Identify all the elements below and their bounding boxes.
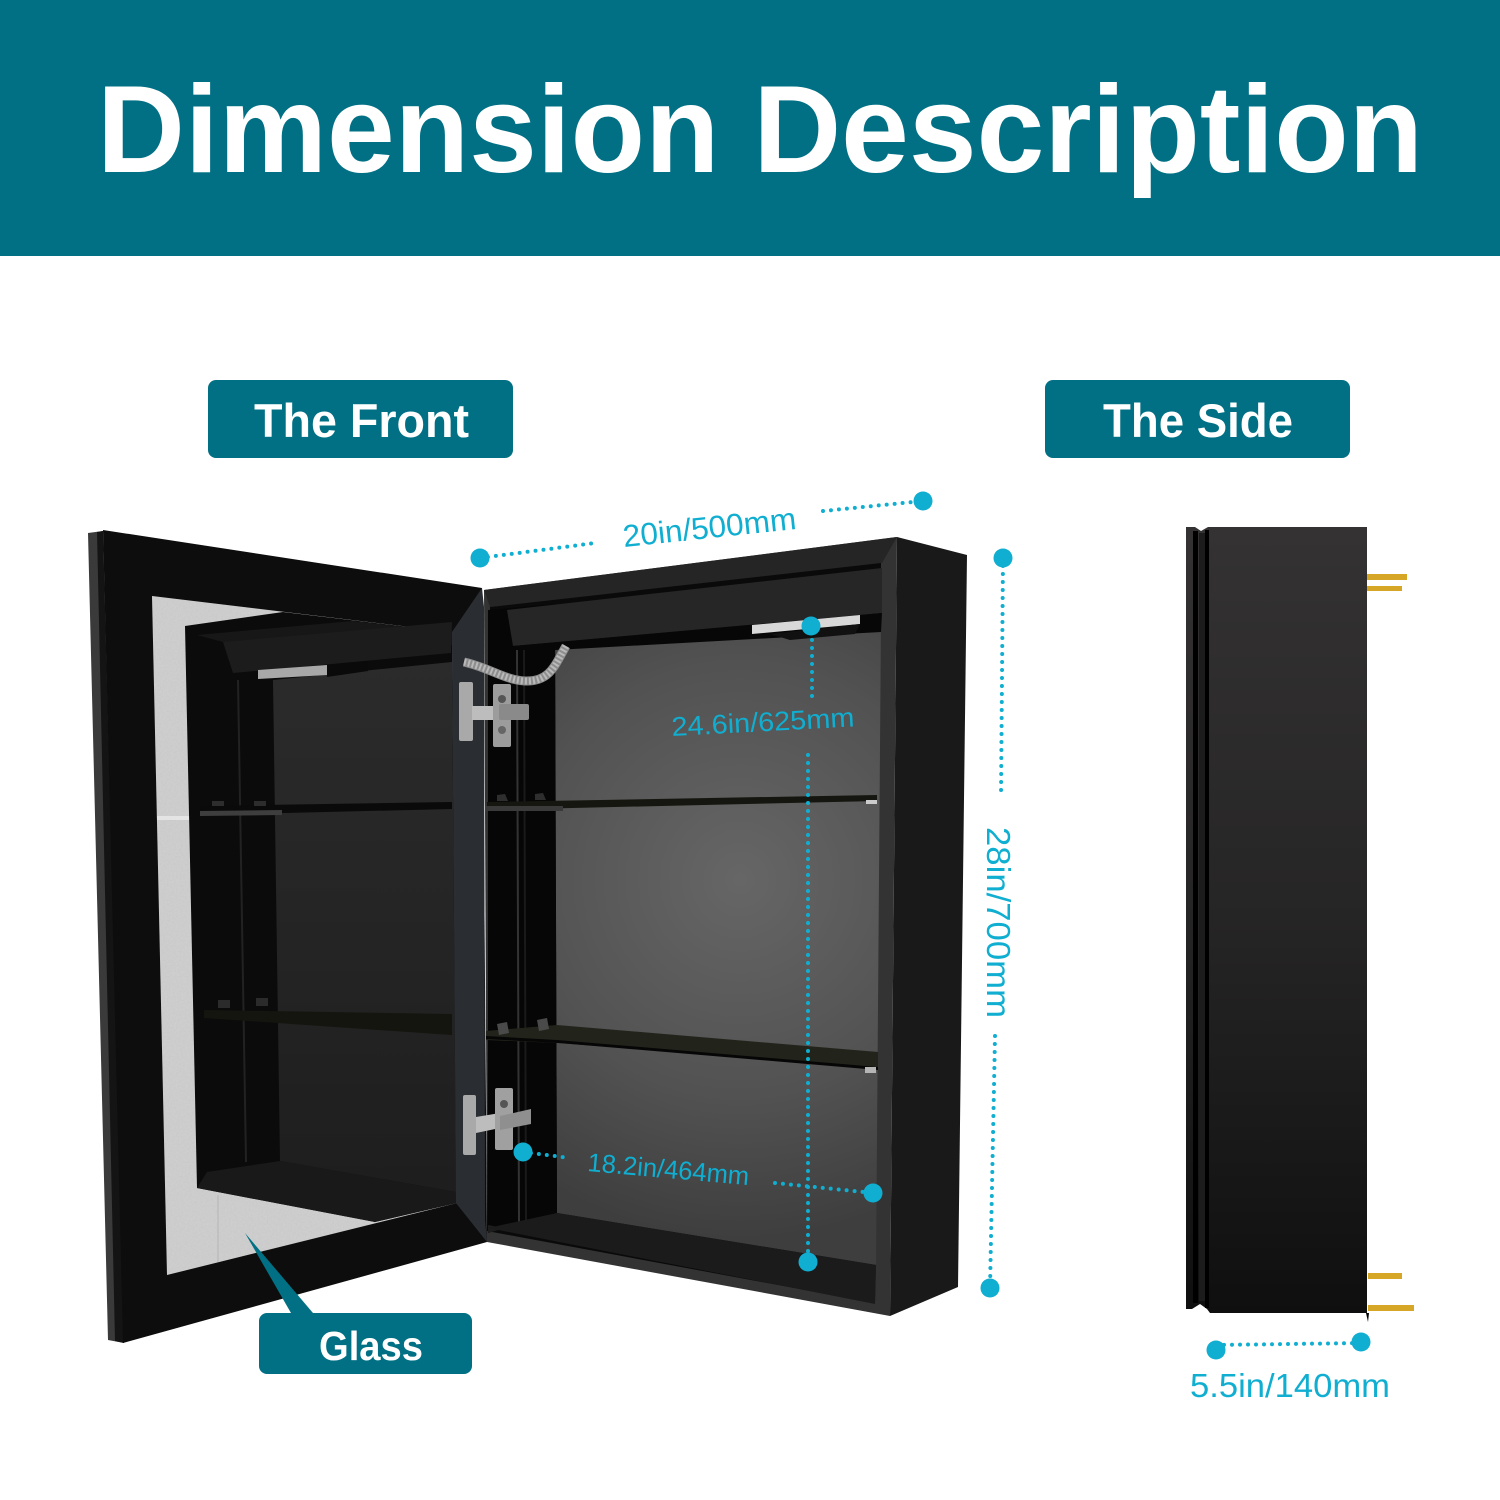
dimension: width 20in/500mm bbox=[470, 492, 932, 568]
cabinet front view bbox=[88, 530, 967, 1343]
badge: The Side bbox=[1045, 380, 1350, 458]
badge: The Side: The Side bbox=[1103, 394, 1293, 447]
dimension: height 28in/700mm: 28in/700mm bbox=[980, 827, 1017, 1018]
title: Dimension Description bbox=[97, 61, 1423, 199]
interior floor bbox=[488, 1213, 876, 1298]
interior left side bbox=[488, 604, 557, 1233]
badge: The Front: The Front bbox=[254, 394, 469, 447]
dimension: inner width 18.2in/464mm bbox=[514, 1142, 882, 1202]
lower hinge bbox=[463, 1088, 531, 1155]
dimension: width 20in/500mm: 20in/500mm bbox=[621, 501, 798, 554]
door hinge edge bbox=[452, 588, 487, 1242]
mounting pins bbox=[1367, 574, 1414, 1311]
upper hinge bbox=[459, 682, 529, 747]
reflected cabinet bbox=[185, 612, 457, 1222]
badge: The Front bbox=[208, 380, 513, 458]
lower shelf bbox=[486, 1018, 878, 1073]
cabinet side view bbox=[1186, 527, 1414, 1322]
interior back wall bbox=[555, 618, 881, 1265]
cabinet body bbox=[484, 537, 967, 1316]
dimension: depth 5.5in/140mm bbox=[1190, 1332, 1390, 1404]
valance bbox=[507, 568, 882, 646]
light strip bbox=[752, 615, 860, 640]
dimension: inner width 18.2in/464mm: 18.2in/464mm bbox=[586, 1147, 750, 1191]
title banner bbox=[0, 0, 1500, 256]
glass panel bbox=[152, 596, 457, 1275]
upper shelf bbox=[485, 793, 877, 811]
cable bbox=[464, 646, 566, 681]
dimension: depth 5.5in/140mm: 5.5in/140mm bbox=[1190, 1367, 1390, 1404]
glass callout bbox=[245, 1233, 472, 1374]
dimension: inner height 24.6in/625mm bbox=[671, 616, 855, 1272]
dimension: inner height 24.6in/625mm: 24.6in/625mm bbox=[671, 702, 855, 742]
open mirror door bbox=[88, 530, 487, 1343]
glass callout: Glass bbox=[319, 1323, 423, 1369]
dimension: height 28in/700mm bbox=[980, 548, 1017, 1298]
